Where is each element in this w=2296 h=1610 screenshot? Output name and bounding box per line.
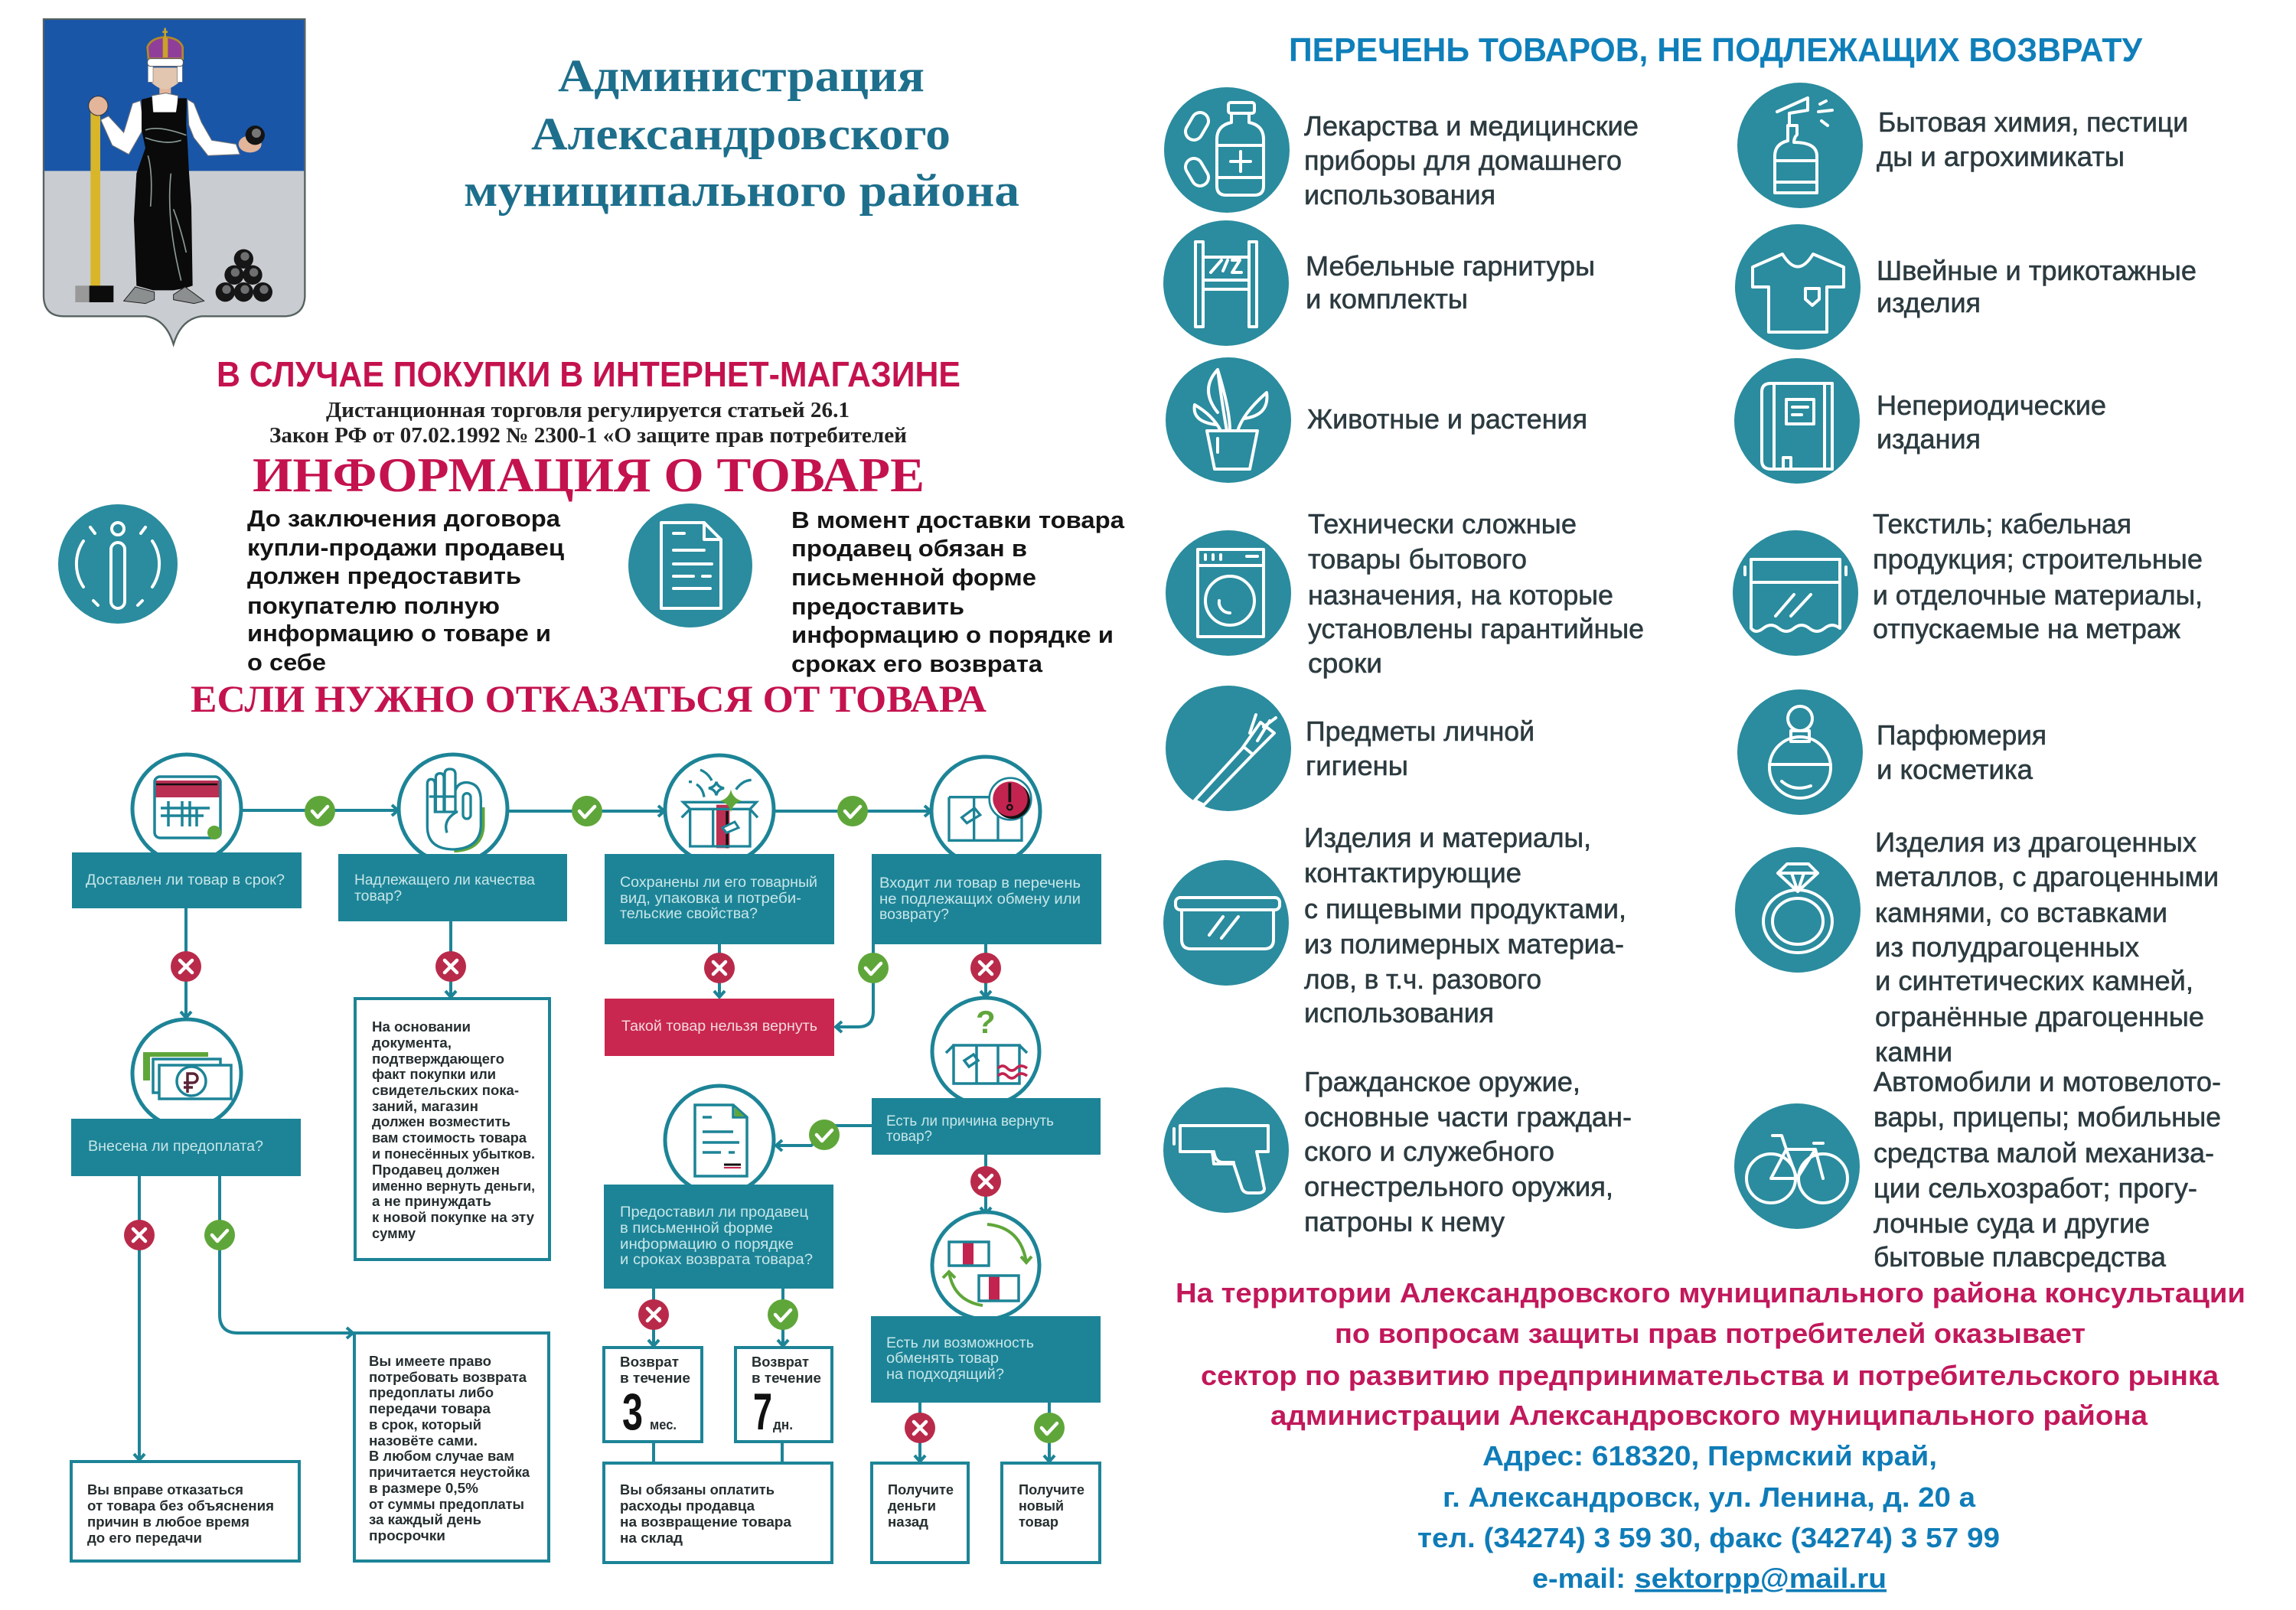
- node: exchange possible: [871, 1212, 1101, 1403]
- text: contact details: sektorpp@mail.ru: [1635, 1563, 1887, 1594]
- box: damages refund: свидетельских пока-: [372, 1082, 519, 1098]
- yes and no badges: [124, 796, 1065, 1443]
- box: damages refund: должен возместить: [372, 1113, 510, 1129]
- item: textile by the metre: Текстиль; кабельная: [1873, 508, 2131, 539]
- item: weapons: основные части граждан-: [1304, 1101, 1632, 1133]
- icon: box with question: [946, 1004, 1027, 1084]
- text: consultation notice: сектор по развитию предпринимательства и потребительского рынка: [1201, 1360, 2219, 1391]
- title: муниципального района: [464, 165, 1019, 216]
- box: prepayment refund: просрочки: [369, 1527, 445, 1543]
- item: textile by the metre: продукция; строительные: [1873, 543, 2203, 575]
- node: packaging preserved: [605, 755, 834, 944]
- box: pay return costs: расходы продавца: [620, 1498, 755, 1514]
- node: on the non-return list: [872, 757, 1101, 944]
- item: jewellery: и синтетических камней,: [1875, 965, 2193, 996]
- flowchart: [71, 754, 1101, 1563]
- text: consultation notice: [1176, 1277, 2245, 1431]
- box: right to refuse: Вы вправе отказаться: [87, 1481, 243, 1498]
- item: medicines: приборы для домашнего: [1304, 145, 1622, 176]
- box: damages refund: именно вернуть деньги,: [372, 1178, 535, 1194]
- text: at delivery: информацию о порядке и: [791, 621, 1114, 648]
- text: before contract: о себе: [247, 649, 326, 676]
- node: quality: Надлежащего ли качества: [354, 872, 535, 888]
- box: prepayment refund: В любом случае вам: [369, 1448, 514, 1464]
- text: contact details: Адрес: 618320, Пермский край,: [1482, 1440, 1937, 1471]
- item: jewellery: камни: [1875, 1036, 1952, 1067]
- item: garments: Швейные и трикотажные: [1877, 255, 2197, 286]
- text: at delivery: сроках его возврата: [791, 650, 1043, 677]
- box: damages refund: факт покупки или: [372, 1066, 496, 1082]
- box: return in 3 months: мес.: [650, 1416, 677, 1432]
- item: hygiene: [1166, 686, 1534, 811]
- text: before contract: покупателю полную: [247, 592, 500, 619]
- box: get money back: [872, 1463, 968, 1563]
- box: damages refund: заний, магазин: [372, 1098, 478, 1114]
- box: get new product: товар: [1019, 1514, 1058, 1530]
- item: complex appliances: товары бытового: [1308, 543, 1527, 575]
- item: books: издания: [1877, 423, 1981, 455]
- item: household chemicals: Бытовая химия, пестици: [1878, 106, 2188, 138]
- item: medicines: использования: [1304, 179, 1495, 210]
- box: prepayment refund: в размере 0,5%: [369, 1480, 478, 1496]
- item: jewellery: металлов, с драгоценными: [1875, 861, 2219, 892]
- box: get money back: Получите: [888, 1481, 954, 1498]
- node: written notice: в письменной форме: [620, 1221, 773, 1237]
- item: furniture: Мебельные гарнитуры: [1306, 250, 1595, 282]
- node: reason to return: товар?: [886, 1129, 932, 1145]
- item: weapons: патроны к нему: [1304, 1206, 1505, 1237]
- box: return in 7 days: в течение: [752, 1370, 821, 1386]
- text: contact details: [1417, 1440, 2000, 1594]
- item: household chemicals: [1737, 83, 2188, 208]
- icon: open box: [682, 770, 758, 848]
- item: weapons: Гражданское оружие,: [1304, 1066, 1580, 1097]
- box: right to refuse: до его передачи: [87, 1530, 202, 1546]
- text: at delivery: В момент доставки товара: [791, 507, 1125, 533]
- box: get money back: назад: [888, 1514, 928, 1530]
- item: complex appliances: установлены гарантийные: [1308, 613, 1644, 644]
- coat of arms: [44, 19, 305, 344]
- box: damages refund: На основании: [372, 1018, 471, 1035]
- box: return in 3 months: [604, 1348, 702, 1442]
- item: food contact materials: Изделия и материалы,: [1304, 822, 1591, 853]
- item: complex appliances: сроки: [1308, 647, 1382, 679]
- item: textile by the metre: [1733, 508, 2203, 656]
- icon: box with question: ?: [976, 1004, 996, 1040]
- box: return in 7 days: [735, 1348, 832, 1442]
- box: prepayment refund: назовёте сами.: [369, 1432, 478, 1449]
- box: pay return costs: Вы обязаны оплатить: [620, 1481, 775, 1498]
- box: prepayment refund: передачи товара: [369, 1400, 491, 1416]
- item: complex appliances: Технически сложные: [1308, 508, 1577, 539]
- box: return in 7 days: Возврат: [752, 1354, 809, 1370]
- box: prepayment refund: Вы имеете право: [369, 1353, 491, 1369]
- item: vehicles: ции сельхозработ; прогу-: [1874, 1172, 2197, 1204]
- box: prepayment refund: в срок, который: [369, 1416, 481, 1432]
- item: household chemicals: ды и агрохимикаты: [1877, 141, 2125, 172]
- box: get new product: Получите: [1019, 1481, 1084, 1498]
- icon: banknotes: [143, 1052, 231, 1099]
- box: prepayment refund: причитается неустойка: [369, 1464, 530, 1480]
- box: get money back: деньги: [888, 1498, 936, 1514]
- box: return in 3 months: 3: [622, 1383, 643, 1441]
- text: at delivery: [791, 507, 1125, 677]
- item: books: Непериодические: [1877, 389, 2106, 421]
- box: get new product: новый: [1019, 1498, 1064, 1514]
- item: food contact materials: из полимерных материа-: [1304, 928, 1624, 960]
- item: textile by the metre: и отделочные материалы,: [1873, 579, 2203, 611]
- icon: calendar: [155, 777, 221, 839]
- item: weapons: [1163, 1066, 1632, 1237]
- item: vehicles: вары, прицепы; мобильные: [1874, 1101, 2221, 1133]
- node: written notice: Предоставил ли продавец: [620, 1204, 808, 1221]
- box: forbidden return: [605, 999, 834, 1056]
- panel: product information: [58, 504, 1125, 677]
- item: jewellery: [1735, 826, 2219, 1067]
- item: food contact materials: лов, в т.ч. разового: [1304, 963, 1541, 995]
- item: vehicles: [1734, 1066, 2221, 1273]
- box: prepayment refund: [354, 1333, 549, 1561]
- text: before contract: купли-продажи продавец: [247, 534, 564, 561]
- box: pay return costs: на склад: [620, 1530, 683, 1546]
- law reference: [269, 399, 907, 448]
- item: food contact materials: [1163, 822, 1626, 1028]
- text: before contract: должен предоставить: [247, 562, 521, 589]
- item: complex appliances: назначения, на которые: [1308, 579, 1613, 611]
- box: damages refund: Продавец должен: [372, 1162, 500, 1178]
- item: animals and plants: Животные и растения: [1307, 403, 1587, 435]
- law reference: Дистанционная торговля регулируется статьей 26.1: [326, 399, 850, 422]
- node: quality: товар?: [354, 888, 402, 904]
- text: before contract: До заключения договора: [247, 505, 561, 532]
- title: Администрация: [558, 51, 925, 101]
- node: exchange possible: Есть ли возможность: [886, 1335, 1034, 1351]
- item: hygiene: Предметы личной: [1306, 715, 1534, 747]
- box: damages refund: и понесённых убытков.: [372, 1146, 535, 1162]
- node: prepayment: [71, 1019, 301, 1176]
- box: return in 3 months: Возврат: [620, 1354, 679, 1370]
- item: weapons: ского и служебного: [1304, 1136, 1554, 1167]
- item: jewellery: Изделия из драгоценных: [1875, 826, 2197, 858]
- box: return in 3 months: в течение: [620, 1370, 690, 1386]
- text: at delivery: предоставить: [791, 593, 964, 620]
- law reference: Закон РФ от 07.02.1992 № 2300-1 «О защите прав потребителей: [269, 424, 907, 448]
- text: consultation notice: администрации Александровского муниципального района: [1270, 1400, 2148, 1431]
- heading: refusing goods: ЕСЛИ НУЖНО ОТКАЗАТЬСЯ ОТ ТОВАРА: [191, 677, 987, 720]
- box: prepayment refund: предоплаты либо: [369, 1384, 494, 1400]
- item: perfume: Парфюмерия: [1877, 719, 2047, 751]
- text: at delivery: продавец обязан в: [791, 535, 1027, 562]
- item: perfume: [1737, 689, 2047, 815]
- item: weapons: огнестрельного оружия,: [1304, 1171, 1613, 1202]
- text: consultation notice: На территории Александровского муниципального района консультации: [1176, 1277, 2245, 1309]
- item: food contact materials: с пищевыми продуктами,: [1304, 893, 1626, 924]
- box: damages refund: документа,: [372, 1035, 452, 1051]
- item: perfume: и косметика: [1877, 754, 2033, 785]
- title: Александровского: [531, 109, 951, 159]
- item: food contact materials: контактирующие: [1304, 857, 1521, 888]
- text: consultation notice: по вопросам защиты прав потребителей оказывает: [1335, 1318, 2086, 1349]
- icon: document: [695, 1105, 747, 1176]
- item: jewellery: из полудрагоценных: [1875, 931, 2139, 963]
- item: furniture: [1163, 220, 1595, 346]
- node: quality: [338, 754, 567, 921]
- node: exchange possible: на подходящий?: [886, 1367, 1004, 1383]
- item: medicines: [1164, 87, 1639, 213]
- node: packaging preserved: тельские свойства?: [620, 906, 758, 922]
- node: on the non-return list: возврату?: [879, 907, 949, 923]
- box: pay return costs: на возвращение товара: [620, 1514, 792, 1530]
- text: at delivery: письменной форме: [791, 564, 1036, 591]
- node: reason to return: Есть ли причина вернуть: [886, 1113, 1054, 1129]
- item: garments: [1735, 224, 2197, 350]
- text: contact details: тел. (34274) 3 59 30, факс (34274) 3 57 99: [1417, 1522, 2000, 1553]
- node: packaging preserved: вид, упаковка и потреби-: [620, 891, 801, 907]
- box: return in 7 days: дн.: [773, 1416, 793, 1432]
- box: damages refund: к новой покупке на эту: [372, 1209, 535, 1225]
- icon: document: [628, 504, 752, 627]
- item: vehicles: средства малой механиза-: [1874, 1137, 2214, 1168]
- item: food contact materials: использования: [1304, 997, 1494, 1028]
- flow connectors: [134, 805, 1055, 1463]
- node: written notice: информацию о порядке: [620, 1237, 794, 1253]
- box: damages refund: подтверждающего: [372, 1051, 504, 1067]
- item: hygiene: гигиены: [1306, 750, 1408, 781]
- box: get new product: [1002, 1463, 1100, 1563]
- item: jewellery: огранённые драгоценные: [1875, 1001, 2204, 1032]
- box: forbidden return: Такой товар нельзя вернуть: [621, 1018, 817, 1035]
- item: garments: изделия: [1877, 287, 1981, 318]
- icon: hand: [427, 769, 484, 851]
- heading: non-returnable list: ПЕРЕЧЕНЬ ТОВАРОВ, НЕ ПОДЛЕЖАЩИХ ВОЗВРАТУ: [1289, 31, 2143, 69]
- node: on the non-return list: Входит ли товар в перечень: [879, 875, 1081, 891]
- node: on the non-return list: не подлежащих обмену или: [879, 891, 1081, 908]
- icon: exchange arrows: [943, 1224, 1032, 1305]
- node: written notice: и сроках возврата товара?: [620, 1252, 813, 1268]
- node: reason to return: [872, 998, 1101, 1155]
- box: damages refund: [355, 999, 550, 1260]
- item: animals and plants: [1166, 357, 1587, 483]
- box: return in 7 days: 7: [753, 1383, 772, 1441]
- node: prepayment: Внесена ли предоплата?: [88, 1139, 263, 1155]
- item: vehicles: лочные суда и другие: [1874, 1208, 2150, 1239]
- icon: box with warning: [949, 778, 1031, 840]
- box: damages refund: сумму: [372, 1225, 416, 1241]
- box: prepayment refund: потребовать возврата: [369, 1369, 527, 1385]
- item: medicines: Лекарства и медицинские: [1304, 110, 1639, 142]
- item: jewellery: камнями, со вставками: [1875, 897, 2167, 928]
- box: pay return costs: [604, 1463, 832, 1563]
- node: delivered on time: [72, 754, 302, 908]
- box: right to refuse: [71, 1462, 299, 1561]
- node: exchange possible: обменять товар: [886, 1351, 999, 1367]
- item: vehicles: Автомобили и мотовелото-: [1874, 1066, 2221, 1097]
- item: furniture: и комплекты: [1306, 283, 1468, 315]
- box: prepayment refund: от суммы предоплаты: [369, 1496, 524, 1512]
- box: right to refuse: от товара без объяснения: [87, 1498, 274, 1514]
- panel: non-returnable goods: [1163, 83, 2221, 1273]
- text: contact details: г. Александровск, ул. Ленина, д. 20 а: [1443, 1481, 1976, 1513]
- text: before contract: информацию о товаре и: [247, 620, 551, 647]
- node: written notice: [604, 1086, 833, 1289]
- icon: info: [58, 504, 178, 624]
- box: prepayment refund: за каждый день: [369, 1511, 481, 1527]
- heading: online purchase: В СЛУЧАЕ ПОКУПКИ В ИНТЕРНЕТ-МАГАЗИНЕ: [217, 354, 960, 394]
- node: packaging preserved: Сохранены ли его товарный: [620, 875, 817, 891]
- item: textile by the metre: отпускаемые на метраж: [1873, 613, 2180, 644]
- item: books: [1734, 358, 2106, 484]
- text: before contract: [247, 505, 564, 676]
- item: complex appliances: [1166, 508, 1644, 679]
- node: delivered on time: Доставлен ли товар в срок?: [86, 872, 285, 888]
- box: damages refund: вам стоимость товара: [372, 1129, 527, 1146]
- item: vehicles: бытовые плавсредства: [1874, 1241, 2167, 1273]
- heading: product information: ИНФОРМАЦИЯ О ТОВАРЕ: [253, 448, 925, 502]
- box: damages refund: а не принуждать: [372, 1193, 491, 1209]
- box: right to refuse: причин в любое время: [87, 1514, 249, 1530]
- title: [464, 51, 1019, 216]
- text: contact details: e-mail:: [1532, 1563, 1626, 1594]
